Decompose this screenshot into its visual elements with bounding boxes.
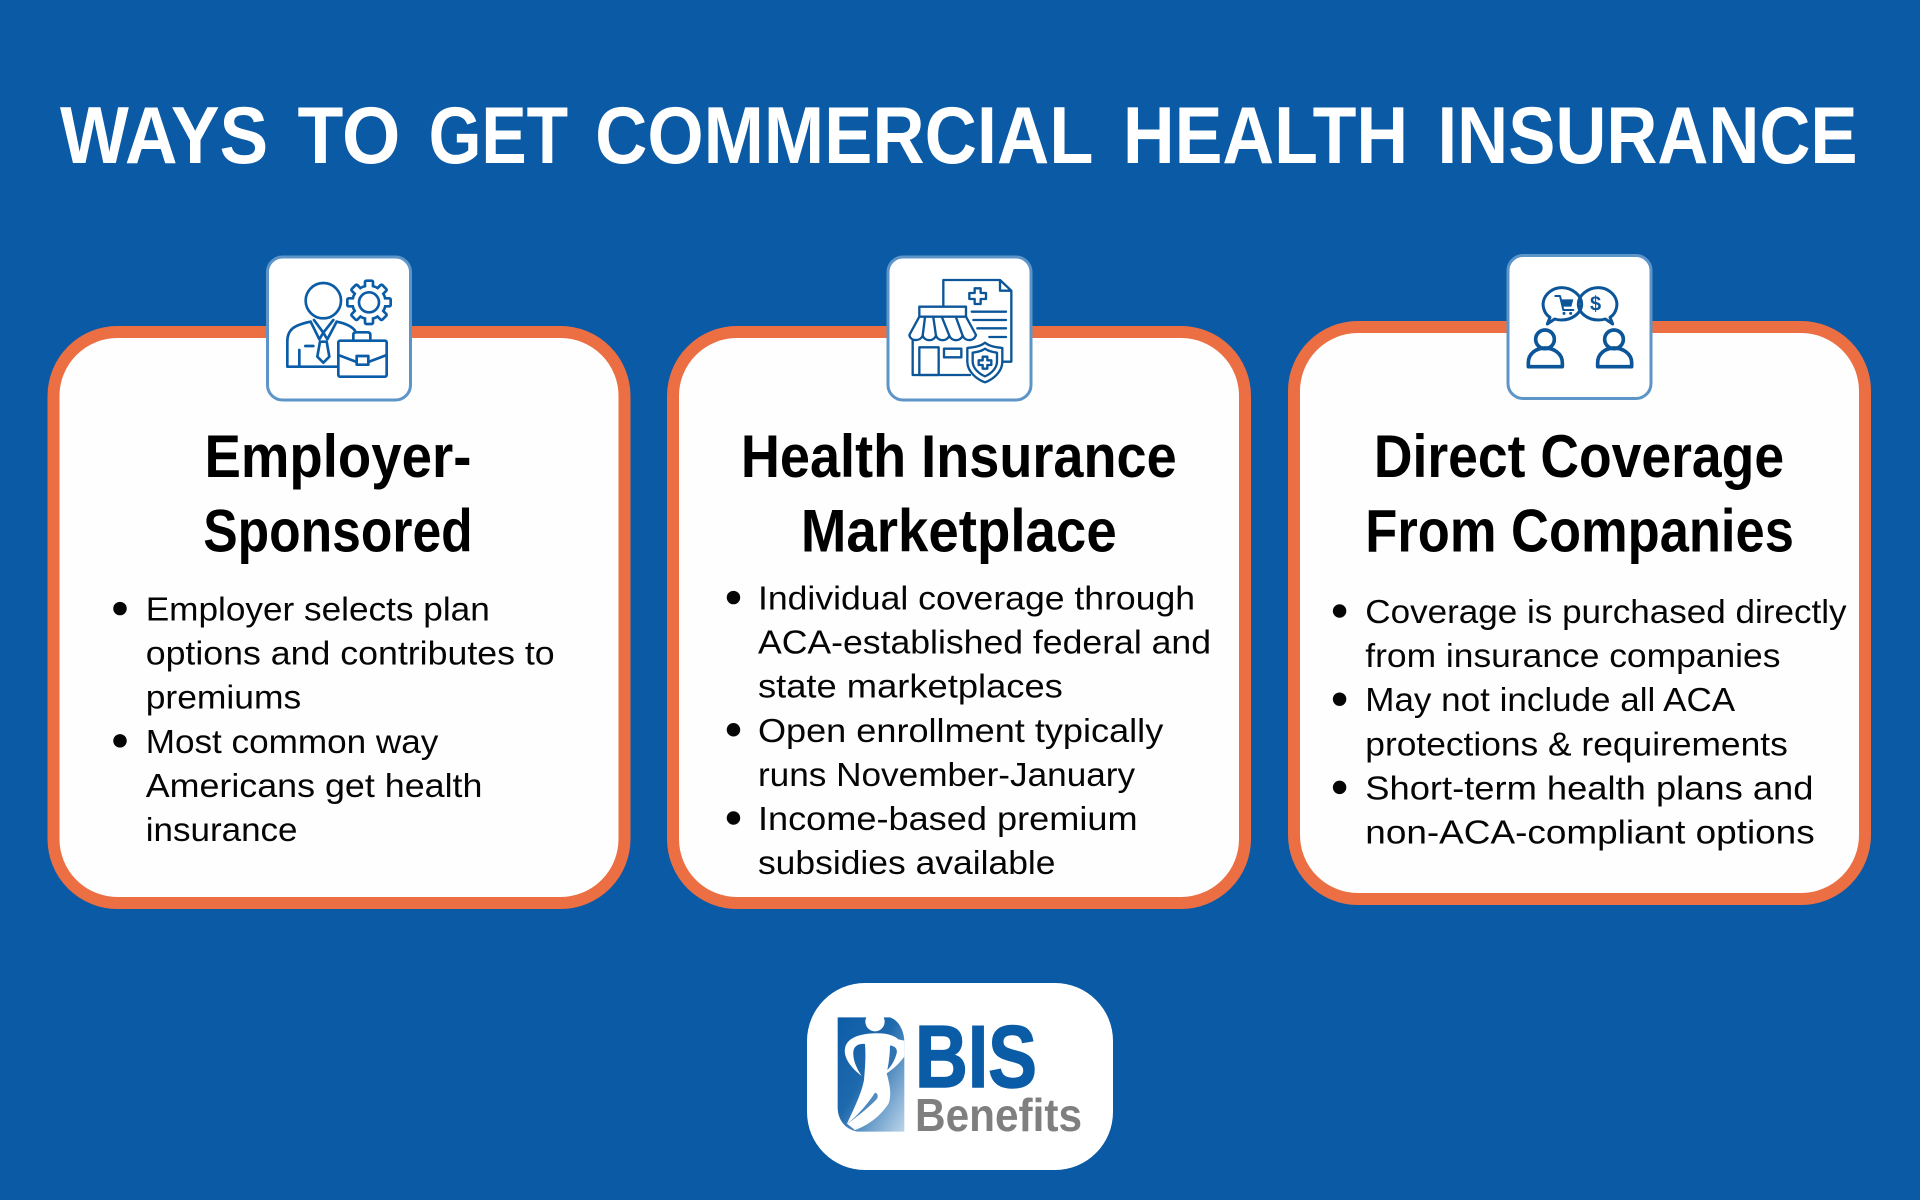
heading: Sponsored: [203, 498, 473, 565]
bullet list: Individual coverage through: [758, 581, 1195, 618]
title: HEALTH: [1123, 91, 1408, 181]
dollar sign: $: [1590, 294, 1601, 316]
bullet list: Short-term health plans and: [1365, 770, 1813, 807]
panel: employer-sponsored: [54, 257, 624, 903]
logo: BIS Benefits: [807, 983, 1113, 1170]
card frame: [54, 332, 624, 903]
heading: Direct Coverage: [1374, 423, 1784, 490]
bullet list: Most common way: [146, 724, 439, 761]
card frame: [673, 332, 1245, 903]
logo mark: runner in shield: [838, 1012, 904, 1132]
bullet list: insurance: [146, 812, 298, 849]
heading: [741, 423, 1177, 565]
bullet list: options and contributes to: [146, 636, 555, 673]
heading: Marketplace: [801, 498, 1117, 565]
card frame: [1294, 327, 1865, 899]
heading: From Companies: [1365, 498, 1794, 565]
bullet list: [1333, 594, 1847, 851]
heading: Health Insurance: [741, 423, 1177, 490]
bullet list: Employer selects plan: [146, 592, 490, 629]
bullet list: premiums: [146, 680, 301, 717]
title: [60, 91, 1858, 181]
bullet list: Americans get health: [146, 768, 482, 805]
bullet list: non-ACA-compliant options: [1365, 814, 1815, 851]
bullet list: May not include all ACA: [1365, 682, 1735, 719]
title: INSURANCE: [1438, 91, 1858, 181]
bullet list: runs November-January: [758, 757, 1136, 794]
bullet list: Open enrollment typically: [758, 713, 1164, 750]
heading: [203, 423, 473, 565]
bullet list: from insurance companies: [1365, 638, 1780, 675]
bullet list: Income-based premium: [758, 801, 1138, 838]
logo wordmark BIS: BIS: [915, 1007, 1037, 1106]
icon: employee with gear and briefcase: [268, 257, 410, 400]
logo wordmark Benefits: Benefits: [915, 1089, 1082, 1141]
bullet list: Coverage is purchased directly: [1365, 594, 1847, 631]
bullet list: state marketplaces: [758, 669, 1063, 706]
bullet list: [113, 592, 555, 849]
bullet list: [727, 581, 1211, 882]
heading: [1365, 423, 1794, 565]
title: COMMERCIAL: [595, 91, 1093, 181]
title: WAYS: [60, 91, 268, 181]
panel: health insurance marketplace: [673, 257, 1245, 903]
title: TO: [298, 91, 400, 181]
panel: direct coverage from companies: [1294, 256, 1865, 899]
bullet list: protections & requirements: [1365, 726, 1788, 763]
bullet list: ACA-established federal and: [758, 625, 1211, 662]
heading: Employer-: [204, 423, 471, 490]
icon: storefront, document and shield: [888, 257, 1031, 400]
icon: two people talking about shopping and money: [1508, 256, 1651, 398]
title: GET: [429, 91, 568, 181]
bullet list: subsidies available: [758, 845, 1056, 882]
